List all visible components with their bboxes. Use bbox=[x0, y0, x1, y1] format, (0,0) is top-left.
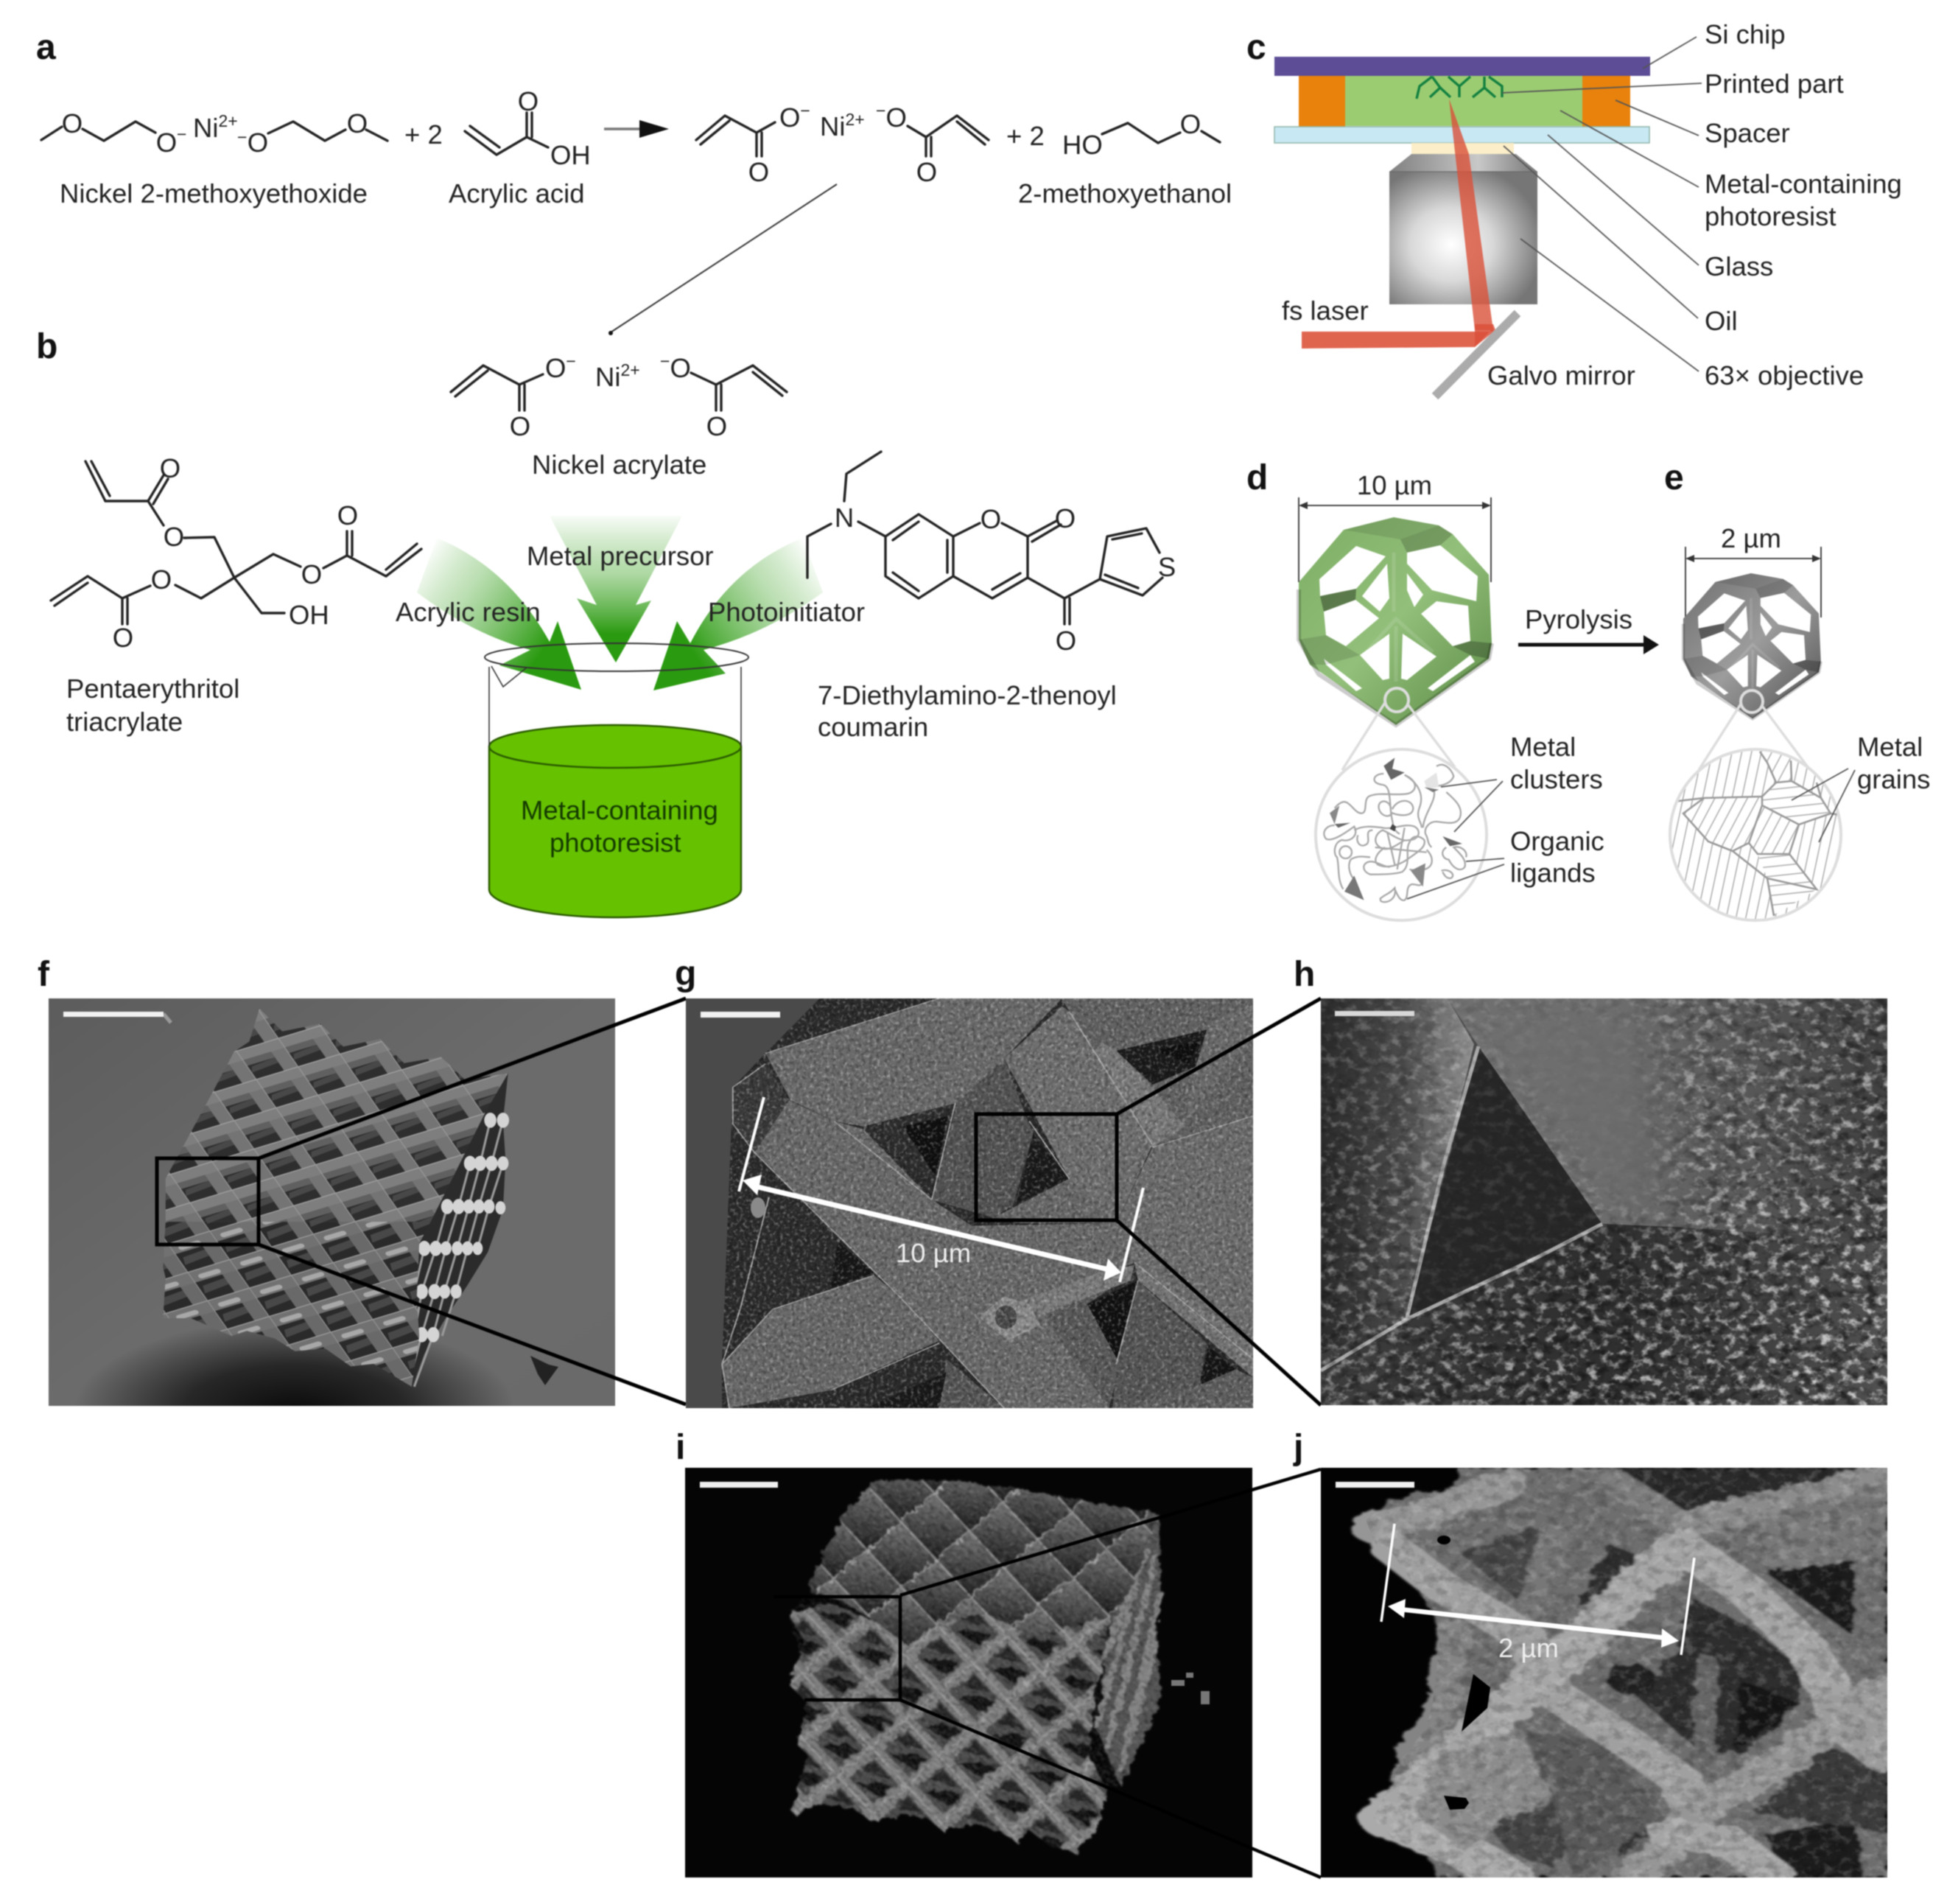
beaker label bbox=[521, 795, 718, 858]
panel: h SEM surface detail bbox=[1321, 998, 1887, 1405]
molecule: pentaerythritol triacrylate: O bbox=[164, 522, 184, 552]
molecule: nickel 2-methoxyethoxide: O bbox=[62, 108, 83, 139]
molecule: product nickel acrylate: O bbox=[779, 102, 800, 133]
molecule: 7-diethylamino-2-thenoyl coumarin: coumarin bbox=[818, 712, 928, 742]
molecule: nickel acrylate: Nickel acrylate bbox=[532, 449, 706, 480]
panel i label: i bbox=[676, 1428, 685, 1467]
molecule: 7-diethylamino-2-thenoyl coumarin: N bbox=[835, 503, 854, 533]
molecule: pentaerythritol triacrylate: O bbox=[337, 500, 358, 531]
molecule: 7-diethylamino-2-thenoyl coumarin bbox=[807, 452, 1176, 742]
setup labels: Spacer bbox=[1705, 118, 1790, 148]
Si chip bbox=[1274, 57, 1650, 76]
d labels with leaders: ligands bbox=[1510, 858, 1596, 888]
molecule: acrylic acid bbox=[465, 86, 591, 170]
panel: a reaction scheme bbox=[36, 28, 1232, 209]
zoom box and connector lines g to h bbox=[976, 998, 1321, 1405]
molecule: product nickel acrylate: − bbox=[876, 101, 885, 120]
arrow labels: Photoinitiator bbox=[708, 597, 865, 627]
d labels with leaders: clusters bbox=[1510, 764, 1603, 794]
molecule: 7-diethylamino-2-thenoyl coumarin: O bbox=[980, 504, 1001, 534]
dimension 10 micrometres on image bbox=[739, 1097, 1143, 1282]
zoom box and connector lines f to g bbox=[157, 998, 686, 1404]
grey polyhedron bbox=[1683, 573, 1821, 718]
molecule: product nickel acrylate bbox=[696, 101, 989, 187]
setup labels: photoresist bbox=[1705, 201, 1837, 231]
ligand chains bbox=[1324, 765, 1467, 902]
scale bar j bbox=[1336, 1482, 1414, 1488]
callout line to nickel acrylate bbox=[608, 184, 837, 335]
panel: j SEM close-up after pyrolysis bbox=[0, 1468, 1887, 1877]
panel: c printing setup bbox=[1246, 19, 1902, 396]
pyrolysis arrow bbox=[1518, 604, 1659, 654]
dark triangular void bbox=[1407, 1046, 1602, 1317]
molecule: product nickel acrylate: 2+ bbox=[845, 110, 865, 129]
oil drop bbox=[1411, 143, 1514, 154]
setup labels: Printed part bbox=[1705, 69, 1844, 99]
molecule: 7-diethylamino-2-thenoyl coumarin: O bbox=[1055, 503, 1076, 533]
molecule: pentaerythritol triacrylate: O bbox=[113, 623, 133, 653]
panel: b resist formulation bbox=[36, 327, 1176, 917]
arrow labels bbox=[396, 541, 865, 627]
panel label e: e bbox=[1664, 458, 1684, 497]
scale bar f bbox=[63, 1012, 164, 1017]
metal clusters bbox=[1330, 757, 1462, 900]
setup labels: Metal-containing bbox=[1705, 169, 1902, 199]
dimension 10 micrometres: 10 µm bbox=[1357, 470, 1432, 500]
molecule: pentaerythritol triacrylate: O bbox=[301, 559, 322, 589]
panel h label: h bbox=[1294, 955, 1315, 994]
beaker label: photoresist bbox=[550, 827, 681, 858]
side face rails bbox=[413, 1074, 510, 1387]
arrow labels: Acrylic resin bbox=[396, 597, 541, 627]
molecule: nickel 2-methoxyethoxide: Ni bbox=[193, 113, 218, 143]
surface texture bbox=[1321, 1468, 1887, 1877]
setup labels bbox=[1282, 19, 1902, 391]
scale bar h bbox=[1335, 1011, 1414, 1016]
objective lens bbox=[1389, 154, 1537, 304]
molecule: product nickel acrylate: O bbox=[916, 157, 937, 187]
molecule: product nickel acrylate: O bbox=[885, 102, 907, 133]
pyrolysis arrow: Pyrolysis bbox=[1525, 604, 1632, 634]
struts bbox=[1372, 1478, 1887, 1877]
molecule: pentaerythritol triacrylate: triacrylate bbox=[66, 707, 183, 737]
panel: e pyrolysed unit cell bbox=[1664, 458, 1930, 922]
molecule: nickel acrylate: O bbox=[510, 411, 530, 441]
beaker label: Metal-containing bbox=[521, 795, 718, 825]
molecule: nickel acrylate: 2+ bbox=[620, 360, 640, 379]
molecule: nickel 2-methoxyethoxide: − bbox=[177, 125, 186, 144]
molecule: product nickel acrylate: O bbox=[748, 157, 769, 187]
molecule: pentaerythritol triacrylate: OH bbox=[289, 600, 329, 630]
front lattice lower part bbox=[163, 1222, 431, 1387]
compound names: Acrylic acid bbox=[449, 178, 585, 209]
panel label a: a bbox=[36, 28, 56, 67]
compound names bbox=[60, 178, 1232, 209]
molecule: 2-methoxyethanol: HO bbox=[1062, 130, 1103, 160]
scale bar i bbox=[700, 1482, 778, 1488]
galvo mirror bbox=[1435, 313, 1518, 396]
molecule: nickel 2-methoxyethoxide: O bbox=[156, 127, 177, 158]
setup labels: Si chip bbox=[1705, 19, 1786, 49]
side face streaks bbox=[1094, 1514, 1161, 1785]
molecule: pentaerythritol triacrylate: O bbox=[151, 564, 172, 595]
setup labels: fs laser bbox=[1282, 295, 1369, 326]
molecule: 2-methoxyethanol bbox=[1062, 109, 1220, 160]
laser beam bbox=[1302, 99, 1495, 349]
lattice beams bbox=[722, 998, 1253, 1408]
molecule: product nickel acrylate: − bbox=[800, 101, 810, 120]
molecule: nickel acrylate bbox=[451, 351, 787, 480]
molecule: pentaerythritol triacrylate: O bbox=[160, 453, 180, 483]
molecule: nickel 2-methoxyethoxide: O bbox=[248, 127, 268, 158]
black pores bbox=[0, 1534, 1490, 1810]
body and voids bbox=[1366, 1468, 1887, 1877]
printed part bbox=[1417, 77, 1502, 99]
e labels with leaders bbox=[1792, 732, 1930, 842]
photoresist layer bbox=[1345, 76, 1582, 126]
dimension 2 micrometres: 2 µm bbox=[1721, 523, 1781, 553]
panel label d: d bbox=[1246, 458, 1268, 497]
arrow labels: Metal precursor bbox=[527, 541, 714, 571]
molecule: 7-diethylamino-2-thenoyl coumarin: 7-Diethylamino-2-thenoyl bbox=[818, 680, 1117, 710]
lattice lower region bbox=[789, 1602, 1112, 1852]
surface debris bbox=[979, 1265, 1134, 1341]
molecule: 7-diethylamino-2-thenoyl coumarin: O bbox=[1056, 626, 1076, 656]
arrow: photoinitiator bbox=[653, 538, 823, 690]
panel: g SEM close-up bbox=[686, 998, 1253, 1408]
panel: d printed unit cell bbox=[1246, 458, 1604, 920]
molecule: pentaerythritol triacrylate: Pentaerythritol bbox=[66, 673, 239, 704]
front lattice upper part bbox=[166, 1009, 508, 1222]
panel: i SEM of pyrolysed lattice bbox=[685, 1468, 1252, 1877]
molecule: pentaerythritol triacrylate bbox=[51, 453, 421, 737]
dimension 10 micrometres bbox=[1299, 470, 1491, 582]
molecule: 2-methoxyethanol: O bbox=[1180, 109, 1201, 139]
panel g label: g bbox=[675, 954, 696, 993]
molecule: nickel acrylate: O bbox=[670, 353, 691, 383]
molecule: 7-diethylamino-2-thenoyl coumarin: S bbox=[1158, 552, 1176, 582]
beaker with liquid bbox=[485, 643, 748, 917]
d labels with leaders: Metal bbox=[1510, 732, 1576, 762]
plus two: + 2 bbox=[404, 119, 443, 150]
d labels with leaders bbox=[1407, 732, 1604, 899]
glass slide bbox=[1274, 127, 1649, 143]
molecule: nickel 2-methoxyethoxide: − bbox=[237, 127, 247, 147]
beam surface grain bbox=[686, 998, 1253, 1408]
panel label b: b bbox=[36, 327, 57, 366]
zoom box and connector lines i to j bbox=[773, 1469, 1321, 1877]
panel f label: f bbox=[38, 955, 50, 994]
molecule: nickel 2-methoxyethoxide: O bbox=[347, 108, 368, 139]
debris bbox=[1171, 1673, 1210, 1704]
setup labels: 63× objective bbox=[1705, 360, 1864, 391]
d labels with leaders: Organic bbox=[1510, 826, 1604, 856]
molecule: nickel acrylate: Ni bbox=[595, 362, 620, 392]
spacers bbox=[1299, 76, 1630, 127]
green polyhedron bbox=[1299, 517, 1492, 725]
e labels with leaders: Metal bbox=[1857, 732, 1923, 762]
panel: f SEM of printed lattice bbox=[48, 998, 616, 1407]
molecule: acrylic acid: O bbox=[518, 86, 539, 116]
arrow: metal precursor bbox=[550, 516, 682, 662]
molecule: nickel 2-methoxyethoxide bbox=[41, 108, 387, 158]
panel label c: c bbox=[1246, 28, 1266, 67]
scale bar g bbox=[701, 1012, 780, 1018]
panel j label: j bbox=[1293, 1428, 1303, 1467]
dimension 2 micrometres on image: 2 µm bbox=[1498, 1633, 1559, 1663]
e labels with leaders: grains bbox=[1857, 764, 1930, 794]
lattice upper region bbox=[810, 1480, 1159, 1646]
dimension 2 micrometres bbox=[1685, 523, 1821, 617]
setup labels: Galvo mirror bbox=[1487, 360, 1635, 391]
compound names: Nickel 2-methoxyethoxide bbox=[60, 178, 368, 209]
plus two: + 2 bbox=[1006, 121, 1045, 151]
dimension 10 micrometres on image: 10 µm bbox=[896, 1238, 971, 1268]
setup labels: Oil bbox=[1705, 306, 1738, 336]
molecule: product nickel acrylate: Ni bbox=[820, 111, 845, 141]
molecule: nickel acrylate: − bbox=[566, 351, 576, 371]
compound names: 2-methoxyethanol bbox=[1018, 178, 1232, 209]
substrate shadow bbox=[88, 1331, 501, 1407]
reaction arrow bbox=[604, 120, 669, 138]
lattice surface mottling bbox=[773, 1470, 1179, 1875]
arrow: acrylic resin bbox=[417, 538, 581, 690]
molecule: acrylic acid: OH bbox=[550, 140, 591, 170]
dimension 2 micrometres on image bbox=[1381, 1524, 1694, 1663]
debris bbox=[164, 1014, 558, 1385]
setup labels: Glass bbox=[1705, 251, 1773, 281]
molecule: nickel acrylate: O bbox=[706, 411, 727, 441]
molecule: nickel 2-methoxyethoxide: 2+ bbox=[218, 111, 238, 130]
magnified composite circle bbox=[1316, 688, 1487, 920]
leader lines bbox=[1502, 37, 1702, 371]
molecule: nickel acrylate: O bbox=[545, 353, 566, 383]
surface texture bbox=[1321, 998, 1887, 1405]
magnified metal grains circle bbox=[1669, 690, 1842, 922]
molecule: nickel acrylate: − bbox=[660, 351, 670, 371]
